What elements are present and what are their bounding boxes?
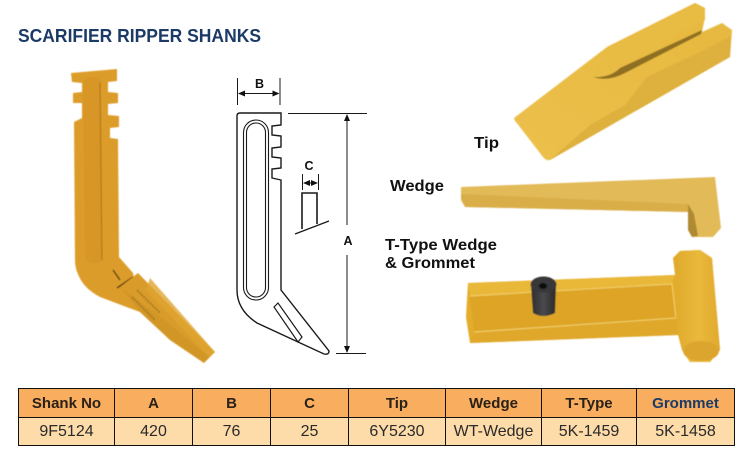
- spec table: Shank No: [32, 394, 101, 412]
- title: SCARIFIER RIPPER SHANKS: [18, 26, 261, 46]
- spec table: 5K-1459: [559, 422, 619, 440]
- grommet: [530, 276, 556, 316]
- spec table: Wedge: [469, 394, 518, 412]
- dimension B: B: [255, 77, 264, 91]
- dimension diagram: [237, 77, 367, 354]
- dimension A: [288, 114, 367, 354]
- label: Tip: Tip: [474, 135, 499, 152]
- spec table: Tip: [386, 394, 408, 412]
- spec table: T-Type: [565, 394, 613, 412]
- spec table: [18, 388, 735, 446]
- photo: wedge: [461, 177, 721, 237]
- dimension C: [295, 159, 329, 234]
- spec table: 9F5124: [39, 422, 94, 440]
- spec table: B: [226, 394, 237, 412]
- dimension B: [238, 77, 280, 105]
- label: Wedge: Wedge: [390, 178, 444, 195]
- spec table: 5K-1458: [655, 422, 716, 440]
- lower slot: [274, 303, 302, 342]
- shank outline: [237, 113, 329, 354]
- dimension C: C: [304, 159, 314, 173]
- photo: T-type wedge: [466, 250, 720, 362]
- spec table: Grommet: [652, 394, 719, 412]
- spec table: WT-Wedge: [454, 422, 533, 440]
- spec table: C: [304, 394, 315, 412]
- spec table: 76: [223, 422, 240, 440]
- label: T-Type Wedge and Grommet: & Grommet: [385, 255, 476, 272]
- spec table: 25: [301, 422, 318, 440]
- label: T-Type Wedge and Grommet: T-Type Wedge: [385, 237, 497, 254]
- long slot: [244, 120, 268, 300]
- spec table: 420: [140, 422, 167, 440]
- spec table: A: [148, 394, 159, 412]
- dimension A: A: [343, 234, 353, 248]
- label: T-Type Wedge and Grommet: [385, 237, 497, 272]
- photo: tip: [514, 3, 732, 160]
- spec table: 6Y5230: [369, 422, 425, 440]
- photo: ripper shank with tip: [71, 69, 215, 363]
